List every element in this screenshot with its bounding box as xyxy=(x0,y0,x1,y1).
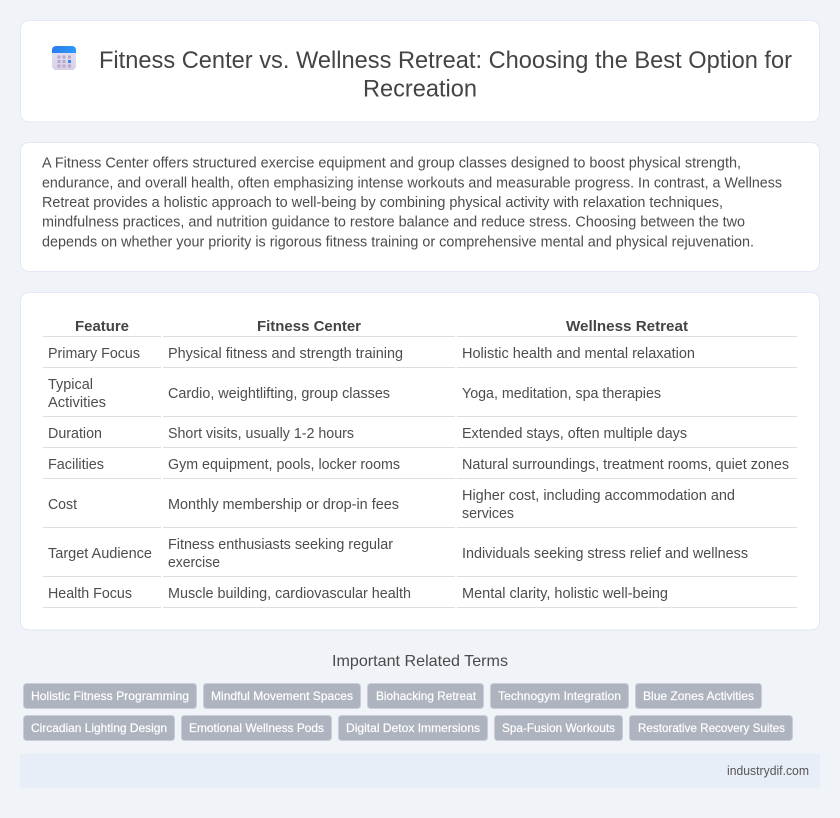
table row: typical activities xyxy=(48,377,661,411)
tag: restorative recovery suites: Restorative Recovery Suites xyxy=(638,721,785,735)
tag: emotional wellness pods xyxy=(182,716,332,740)
title: Fitness Center vs. Wellness Retreat: Choosing the Best Option for xyxy=(99,47,792,74)
table row: target audience: Individuals seeking stress relief and wellness xyxy=(462,546,748,562)
panel: title header xyxy=(20,20,820,122)
tag: restorative recovery suites xyxy=(630,716,792,740)
table row: primary focus: Holistic health and mental relaxation xyxy=(462,346,695,362)
title xyxy=(99,47,792,102)
table row: primary focus xyxy=(48,346,695,362)
tag list: related terms xyxy=(24,684,792,740)
table row: target audience: Target Audience xyxy=(48,546,152,562)
table row: typical activities: Cardio, weightlifting, group classes xyxy=(168,386,390,402)
tag: spa-fusion workouts xyxy=(494,716,622,740)
tag: holistic fitness programming: Holistic Fitness Programming xyxy=(31,689,189,703)
tag: technogym integration: Technogym Integration xyxy=(498,689,621,703)
text block: introduction paragraph: mindfulness practices, and nutrition guidance to restore balance and reduce stress. Choosing between the two xyxy=(42,215,745,231)
text block: introduction paragraph xyxy=(42,156,782,250)
text block: introduction paragraph: depends on whether your priority is rigorous fitness training or comprehensive mental and physical rejuvenation. xyxy=(42,234,754,250)
table header row: Fitness Center xyxy=(257,319,361,335)
table row: facilities: Facilities xyxy=(48,457,104,473)
table row: health focus: Muscle building, cardiovascular health xyxy=(168,586,411,602)
panel: introduction xyxy=(20,142,820,272)
table row: target audience: exercise xyxy=(168,555,220,571)
tag: mindful movement spaces xyxy=(204,684,360,708)
tag: blue zones activities xyxy=(636,684,762,708)
table row: primary focus: Physical fitness and strength training xyxy=(168,346,403,362)
table row: duration: Short visits, usually 1-2 hours xyxy=(168,426,354,442)
tag: circadian lighting design xyxy=(24,716,174,740)
table header row: Feature xyxy=(75,319,129,335)
table row: typical activities: Yoga, meditation, spa therapies xyxy=(462,386,661,402)
icon: calendar xyxy=(52,46,76,70)
tag: mindful movement spaces: Mindful Movement Spaces xyxy=(211,689,353,703)
table row: primary focus: Primary Focus xyxy=(48,346,140,362)
tag: spa-fusion workouts: Spa-Fusion Workouts xyxy=(502,721,615,735)
table row: health focus xyxy=(48,586,668,602)
tag: holistic fitness programming xyxy=(24,684,196,708)
tag: emotional wellness pods: Emotional Wellness Pods xyxy=(189,721,324,735)
tag: biohacking retreat xyxy=(368,684,484,708)
table row: facilities: Natural surroundings, treatment rooms, quiet zones xyxy=(462,457,789,473)
table row: duration: Duration xyxy=(48,426,102,442)
table row: health focus: Mental clarity, holistic well-being xyxy=(462,586,668,602)
table row: target audience: Fitness enthusiasts seeking regular xyxy=(168,537,393,553)
tag: digital detox immersions xyxy=(338,716,488,740)
panel: comparison table xyxy=(20,292,820,630)
table row: cost: Cost xyxy=(48,497,77,513)
table row: target audience xyxy=(48,537,748,571)
tag: technogym integration xyxy=(490,684,628,708)
table row: duration: Extended stays, often multiple days xyxy=(462,426,687,442)
table row: duration xyxy=(48,426,687,442)
title: Recreation xyxy=(363,76,477,102)
table row: facilities xyxy=(48,457,789,473)
table row: cost: Higher cost, including accommodation and xyxy=(462,488,735,504)
table row: cost: services xyxy=(462,506,514,522)
table header row: Wellness Retreat xyxy=(566,319,688,335)
heading: important related terms: Important Related Terms xyxy=(332,653,508,670)
table row: facilities: Gym equipment, pools, locker rooms xyxy=(168,457,400,473)
table row: cost: Monthly membership or drop-in fees xyxy=(168,497,399,513)
table row: typical activities: Typical xyxy=(48,377,93,393)
tag: digital detox immersions: Digital Detox Immersions xyxy=(346,721,480,735)
footer xyxy=(20,754,820,788)
table row: health focus: Health Focus xyxy=(48,586,132,602)
table header row xyxy=(75,319,688,335)
text block: introduction paragraph: Retreat provides a holistic approach to well-being by combining physical activity with relaxation techniques, xyxy=(42,195,723,211)
table row: cost xyxy=(48,488,735,522)
tag: circadian lighting design: Circadian Lighting Design xyxy=(31,721,167,735)
footer source text: industrydif.com xyxy=(727,764,809,778)
tag: blue zones activities: Blue Zones Activities xyxy=(643,689,754,703)
text block: introduction paragraph: endurance, and overall health, often emphasizing intense workouts and measurable progress. In contrast, a Wellness xyxy=(42,175,782,191)
tag: biohacking retreat: Biohacking Retreat xyxy=(376,689,477,703)
text block: introduction paragraph: A Fitness Center offers structured exercise equipment and group classes designed to boost physical strength, xyxy=(42,156,741,172)
table row: typical activities: Activities xyxy=(48,395,106,411)
